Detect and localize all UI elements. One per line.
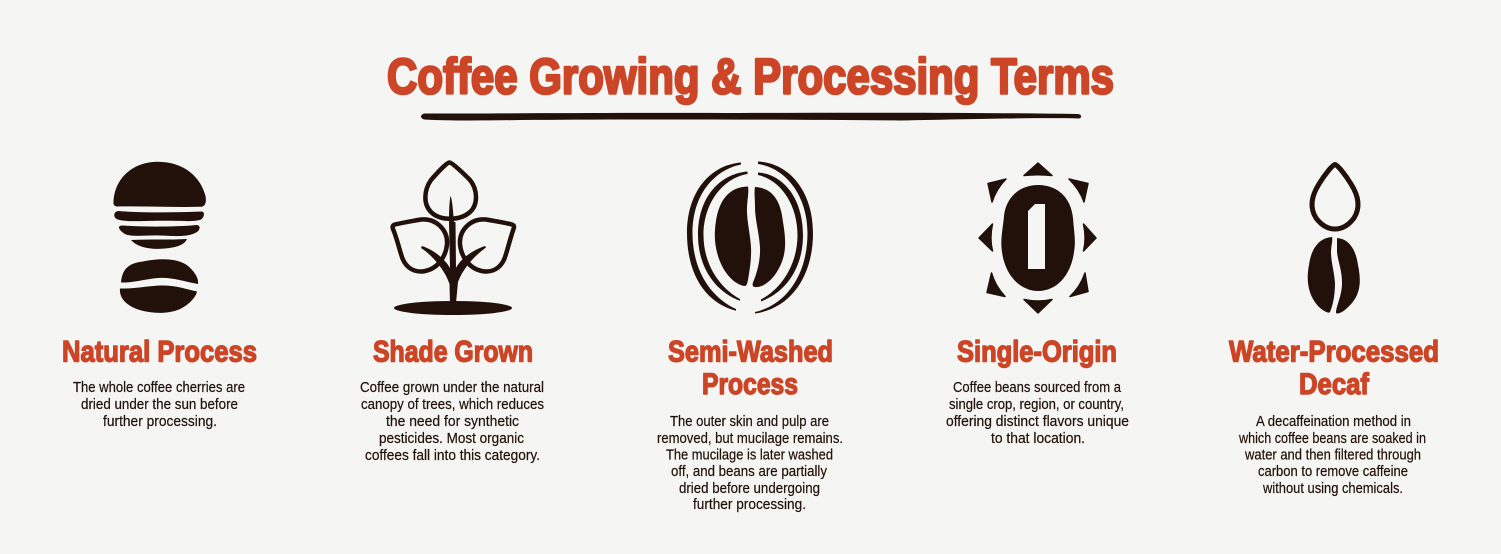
text: natural process description xyxy=(73,380,245,430)
text: shade grown description: pesticides. Most organic xyxy=(379,431,524,447)
text: natural process description: dried under the sun before xyxy=(81,397,238,413)
panel: shade grown xyxy=(360,162,544,464)
heading: Semi-Washed Process: Semi-Washed xyxy=(668,336,833,368)
text: single-origin description: single crop, region, or country, xyxy=(949,397,1124,413)
panel: single-origin xyxy=(946,163,1129,447)
heading: Water-Processed Decaf: Decaf xyxy=(1299,368,1370,401)
heading: Semi-Washed Process: Process xyxy=(702,368,798,401)
text: single-origin description: offering distinct flavors unique xyxy=(946,414,1129,430)
panel: semi-washed process xyxy=(657,162,843,513)
text: semi-washed description xyxy=(657,414,843,513)
text: semi-washed description: The mucilage is later washed xyxy=(666,448,833,464)
text: water-processed description xyxy=(1238,414,1426,497)
text: water-processed description: which coffee beans are soaked in xyxy=(1238,431,1426,447)
icon: bean with number one and rays xyxy=(979,163,1096,313)
heading: Semi-Washed Process xyxy=(668,336,833,401)
panel: natural process xyxy=(62,162,257,430)
icon: sun over coffee bean xyxy=(113,162,206,313)
heading: Shade Grown: Shade Grown xyxy=(373,336,533,368)
title: Coffee Growing & Processing Terms xyxy=(387,48,1114,104)
text: water-processed description: without using chemicals. xyxy=(1262,481,1403,497)
text: semi-washed description: off, and beans are partially xyxy=(671,464,828,480)
text: single-origin description xyxy=(946,380,1129,447)
text: single-origin description: Coffee beans sourced from a xyxy=(953,380,1122,396)
text: semi-washed description: The outer skin and pulp are xyxy=(670,414,829,430)
text: shade grown description: the need for synthetic xyxy=(386,414,519,430)
text: semi-washed description: further processing. xyxy=(693,497,806,513)
panel: water-processed decaf xyxy=(1229,164,1439,497)
text: single-origin description: to that location. xyxy=(991,431,1085,447)
icon: coffee bean with layered arcs xyxy=(687,162,813,314)
text: water-processed description: A decaffeination method in xyxy=(1256,414,1411,430)
text: shade grown description: Coffee grown under the natural xyxy=(360,380,544,396)
heading: Single-Origin: Single-Origin xyxy=(957,336,1117,368)
text: water-processed description: carbon to remove caffeine xyxy=(1258,464,1408,480)
icon: water drop above bean xyxy=(1308,164,1360,313)
text: shade grown description: canopy of trees, which reduces xyxy=(361,397,544,413)
text: semi-washed description: removed, but mucilage remains. xyxy=(657,431,843,447)
heading: Natural Process: Natural Process xyxy=(62,336,257,368)
heading: Water-Processed Decaf xyxy=(1229,336,1439,401)
text: semi-washed description: dried before undergoing xyxy=(679,481,820,497)
text: shade grown description xyxy=(360,380,544,464)
text: water-processed description: water and then filtered through xyxy=(1244,448,1421,464)
title underline xyxy=(421,113,1081,120)
text: natural process description: further processing. xyxy=(103,414,217,430)
text: shade grown description: coffees fall into this category. xyxy=(365,448,540,464)
icon: plant with three leaves xyxy=(393,162,514,315)
text: natural process description: The whole coffee cherries are xyxy=(73,380,245,396)
heading: Water-Processed Decaf: Water-Processed xyxy=(1229,336,1439,368)
